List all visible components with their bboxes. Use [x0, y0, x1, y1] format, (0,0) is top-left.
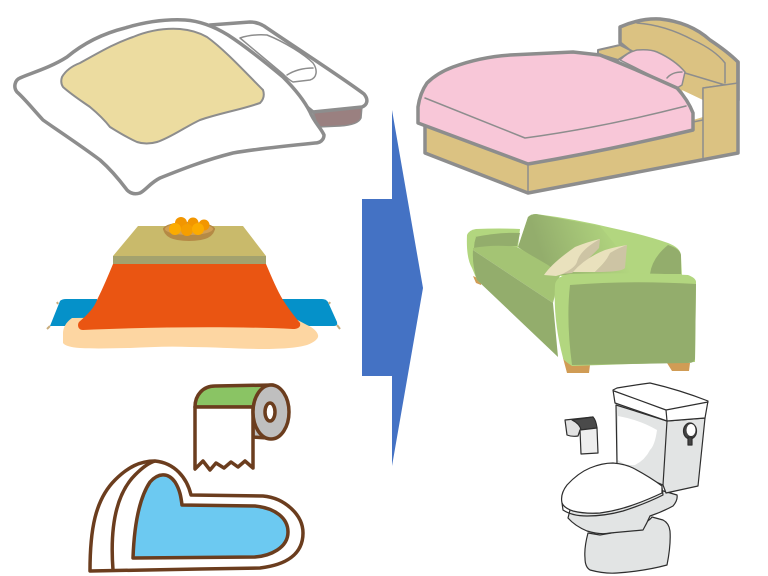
icon: squat toilet [90, 461, 303, 571]
icon: kotatsu table [47, 217, 340, 349]
icon: western toilet [562, 383, 708, 573]
arrow [362, 110, 423, 466]
icon: bowl of oranges [163, 217, 215, 241]
cushions [544, 239, 627, 276]
icon: futon [15, 20, 367, 194]
icon: bed [418, 19, 738, 193]
icon: sofa [467, 214, 696, 373]
icon: toilet paper roll [195, 385, 289, 470]
